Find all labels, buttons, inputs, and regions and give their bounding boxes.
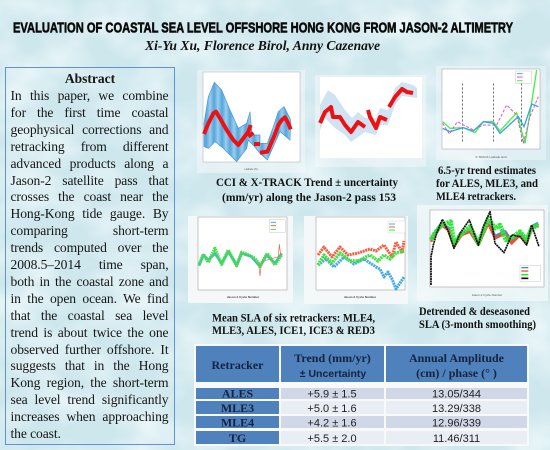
chart: 6.5-yr trend estimates: X-TRACK Latitude Grid [475,155,507,159]
panel: abstract: Jason-2 satellite pass that [10,172,168,188]
table header: (cm) / phase (° ) [416,366,497,380]
table header: Trend (mm/yr) [294,351,371,365]
caption: detrended and deseasoned SLA: SLA (3-month smoothing) [419,319,536,331]
caption: 6.5-yr trend estimates: 6.5-yr trend estimates [438,165,536,177]
chart: detrended and deseasoned SLA [417,205,548,301]
table rows: +4.2 ± 1.6 [307,418,357,430]
table header: ± Uncertainty [300,368,366,380]
panel: abstract [5,67,175,445]
panel: abstract: both in the coastal zone and [10,274,168,289]
caption: detrended and deseasoned SLA [419,306,536,331]
panel: abstract: geophysical corrections and [10,122,168,137]
caption: 6.5-yr trend estimates [436,165,539,203]
caption: CCI and X-TRACK trend: (mm/yr) along the Jason-2 pass 153 [222,192,396,204]
chart: mean SLA of retrackers, left: Jason-2 Cycle Number [227,295,260,299]
panel: abstract: 2008.5–2014 time span, [10,257,168,272]
panel: abstract: In this paper, we combine [10,88,168,103]
panel: abstract: observed further offshore. It [10,342,168,356]
table rows: 13.29/338 [432,403,481,415]
panel: abstract: Hong-Kong tide gauge. By [10,206,168,221]
table rows: ALES [222,386,253,400]
panel: abstract: the coast. [10,426,61,441]
caption: 6.5-yr trend estimates: for ALES, MLE3, and [436,178,539,190]
caption: mean SLA of six retrackers [212,312,375,337]
table header: Annual Amplitude [409,351,505,365]
panel: abstract: Abstract [65,71,115,86]
panel: abstract: Kong region, the short-term [10,375,168,390]
chart: 6.5-yr trend estimates [436,66,546,160]
panel: abstract: in the open ocean. We find [10,291,168,306]
chart: detrended and deseasoned SLA: Jason-2 Cycle Number [472,293,502,297]
table rows: 13.05/344 [432,388,481,400]
table rows: MLE3 [221,401,254,415]
table header: Retracker [212,358,264,372]
chart: mean SLA of retrackers, right [304,216,408,304]
chart: CCI trend with uncertainty [197,70,305,173]
chart: CCI trend with uncertainty: Latitude (N) [244,168,258,171]
caption: CCI and X-TRACK trend: CCI & X-TRACK Trend ± uncertainty [216,177,398,189]
table rows: 11.46/311 [433,433,480,445]
table: retracker results [194,344,529,446]
caption: 6.5-yr trend estimates: MLE4 retrackers. [436,191,516,203]
table rows: +5.5 ± 2.0 [307,433,357,445]
table header [196,346,527,382]
table rows: TG [229,431,246,445]
panel: abstract: retracking from different [10,139,168,154]
panel: abstract: comparing short-term [10,223,168,238]
panel: abstract: sea level trend significantly [10,392,168,407]
caption: mean SLA of six retrackers: MLE3, ALES, ICE1, ICE3 & RED3 [212,325,375,337]
chart: mean SLA of retrackers, left [188,216,293,303]
table rows [196,386,527,445]
panel: abstract: for the first time coastal [10,105,168,120]
panel: abstract: trends computed over the [10,240,168,255]
caption: CCI and X-TRACK trend [216,177,398,204]
table rows: +5.9 ± 1.5 [307,388,357,400]
table rows: MLE4 [221,416,254,430]
table rows: 12.96/339 [432,418,481,430]
chart: X-TRACK trend with uncertainty [315,75,426,167]
panel: abstract: increases when approaching [10,409,168,424]
chart: mean SLA of retrackers, right: Jason-2 Cycle Number [344,295,377,299]
panel: abstract: advanced products along a [10,156,168,171]
table rows: +5.0 ± 1.6 [307,403,357,415]
panel: abstract: trend is about twice the one [10,325,168,340]
caption: mean SLA of six retrackers: Mean SLA of six retrackers: MLE4, [212,312,375,324]
panel: abstract: crosses the coast near the [10,189,168,204]
panel: abstract: suggests that in the Hong [10,358,168,373]
authors: Xi-Yu Xu, Florence Birol, Anny Cazenave [144,38,380,53]
caption: detrended and deseasoned SLA: Detrended & deseasoned [419,306,531,318]
panel: abstract: that the coastal sea level [10,308,168,323]
